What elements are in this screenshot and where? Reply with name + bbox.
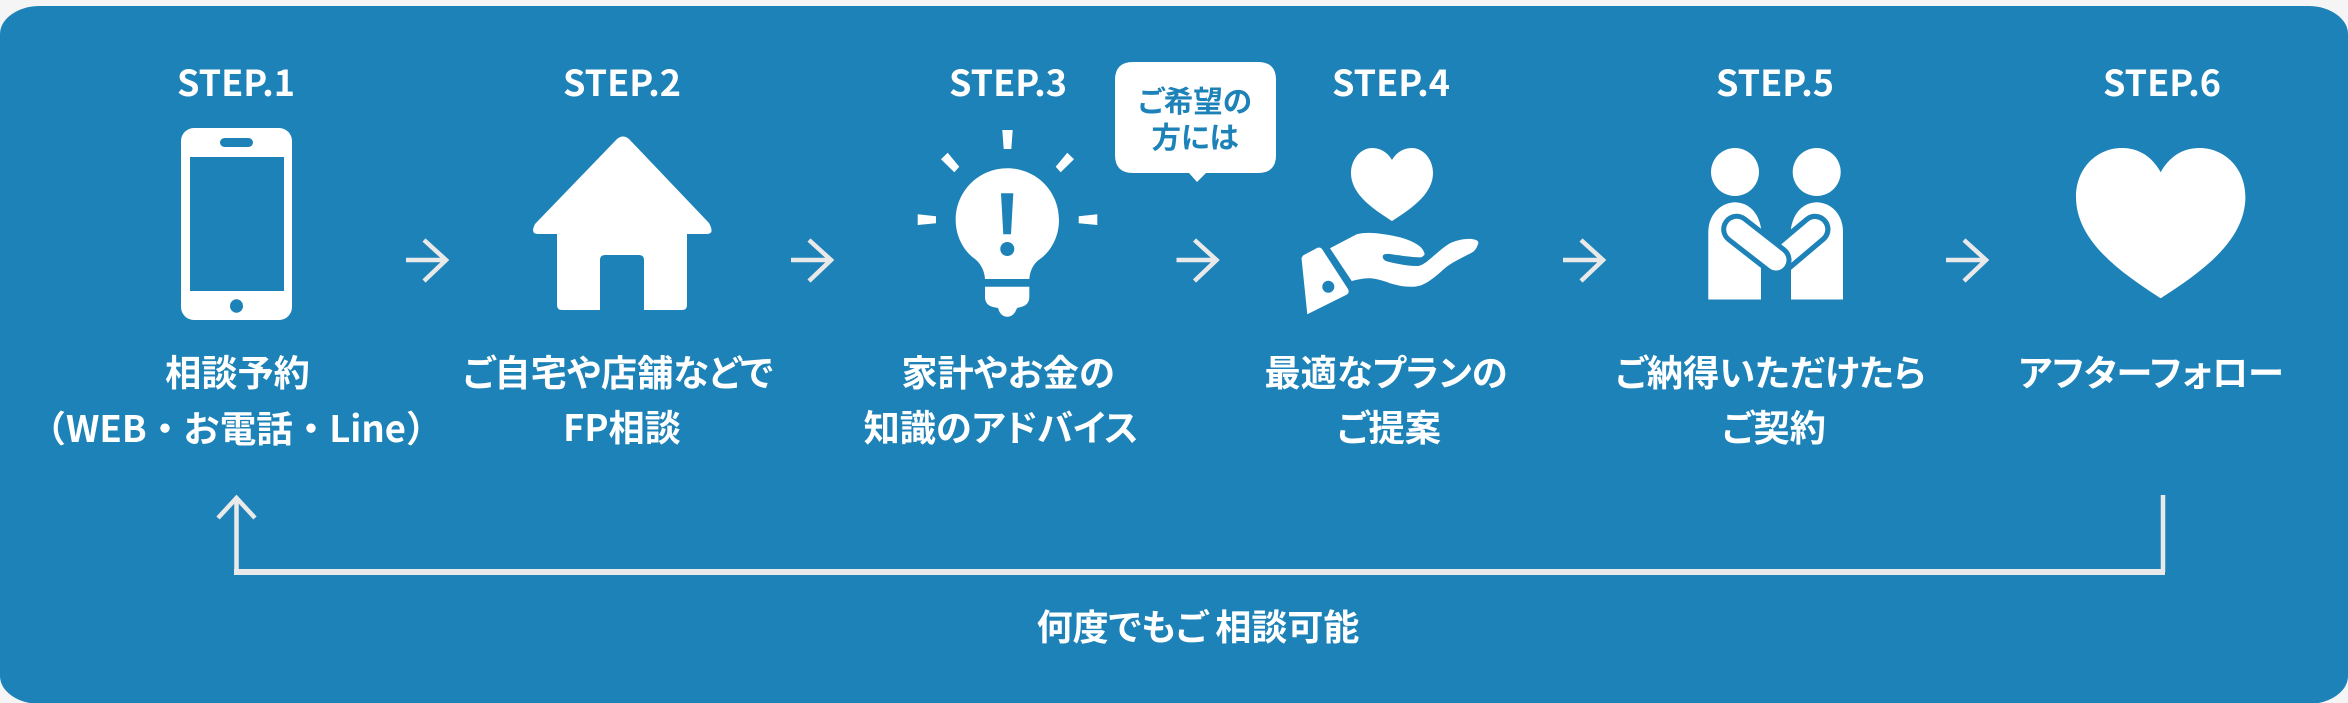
text: step 5 label: ご納得いただけたら xyxy=(1615,344,1926,396)
text: step 3 label xyxy=(864,344,1138,452)
icon: two people shaking hands xyxy=(1708,148,1843,300)
text: step 2 label: FP相談 xyxy=(563,400,681,452)
heading: step 2: STEP.2 xyxy=(563,55,681,107)
heading: step 5: STEP.5 xyxy=(1716,55,1834,107)
callout: speech bubble: ご希望の xyxy=(1138,79,1252,121)
callout: speech bubble: 方には xyxy=(1151,115,1239,157)
heading: step 4: STEP.4 xyxy=(1332,55,1450,107)
text: step 5 label: ご契約 xyxy=(1722,400,1826,452)
text: step 1 label: 相談予約 xyxy=(165,344,310,396)
arrow: step 3 to 4 xyxy=(1176,240,1216,281)
icon: light bulb xyxy=(918,130,1097,317)
icon: heart over hand xyxy=(1302,148,1478,314)
text: step 4 label: 最適なプランの xyxy=(1264,344,1508,396)
heading: step 3: STEP.3 xyxy=(949,55,1067,107)
text: step 2 label xyxy=(463,344,773,452)
arrow: step 4 to 5 xyxy=(1563,240,1603,281)
text: step 1 label xyxy=(30,344,442,452)
text: loop label: 何度でもご 相談可能 xyxy=(1037,599,1359,651)
arrow: step 5 to 6 xyxy=(1946,240,1986,281)
text: step 1 label: （WEB・お電話・Line） xyxy=(30,400,442,452)
text: step 6 label: アフターフォロー xyxy=(2018,344,2284,396)
arrow: step 1 to 2 xyxy=(406,240,446,281)
icon: large heart xyxy=(2076,148,2245,298)
text: step 2 label: ご自宅や店舗などで xyxy=(463,344,773,396)
text: step 4 label xyxy=(1264,344,1508,452)
text: step 3 label: 家計やお金の xyxy=(901,344,1115,396)
arrow: step 2 to 3 xyxy=(791,240,831,281)
text: step 3 label: 知識のアドバイス xyxy=(864,400,1138,452)
text: step 4 label: ご提案 xyxy=(1337,400,1441,452)
arrow: loop back to step 1 xyxy=(218,495,2165,572)
callout: speech bubble xyxy=(1115,62,1276,182)
icon: house xyxy=(533,136,712,310)
heading: step 1: STEP.1 xyxy=(177,55,295,107)
heading: step 6: STEP.6 xyxy=(2103,55,2221,107)
text: step 5 label xyxy=(1615,344,1926,452)
icon: smartphone xyxy=(181,128,292,320)
